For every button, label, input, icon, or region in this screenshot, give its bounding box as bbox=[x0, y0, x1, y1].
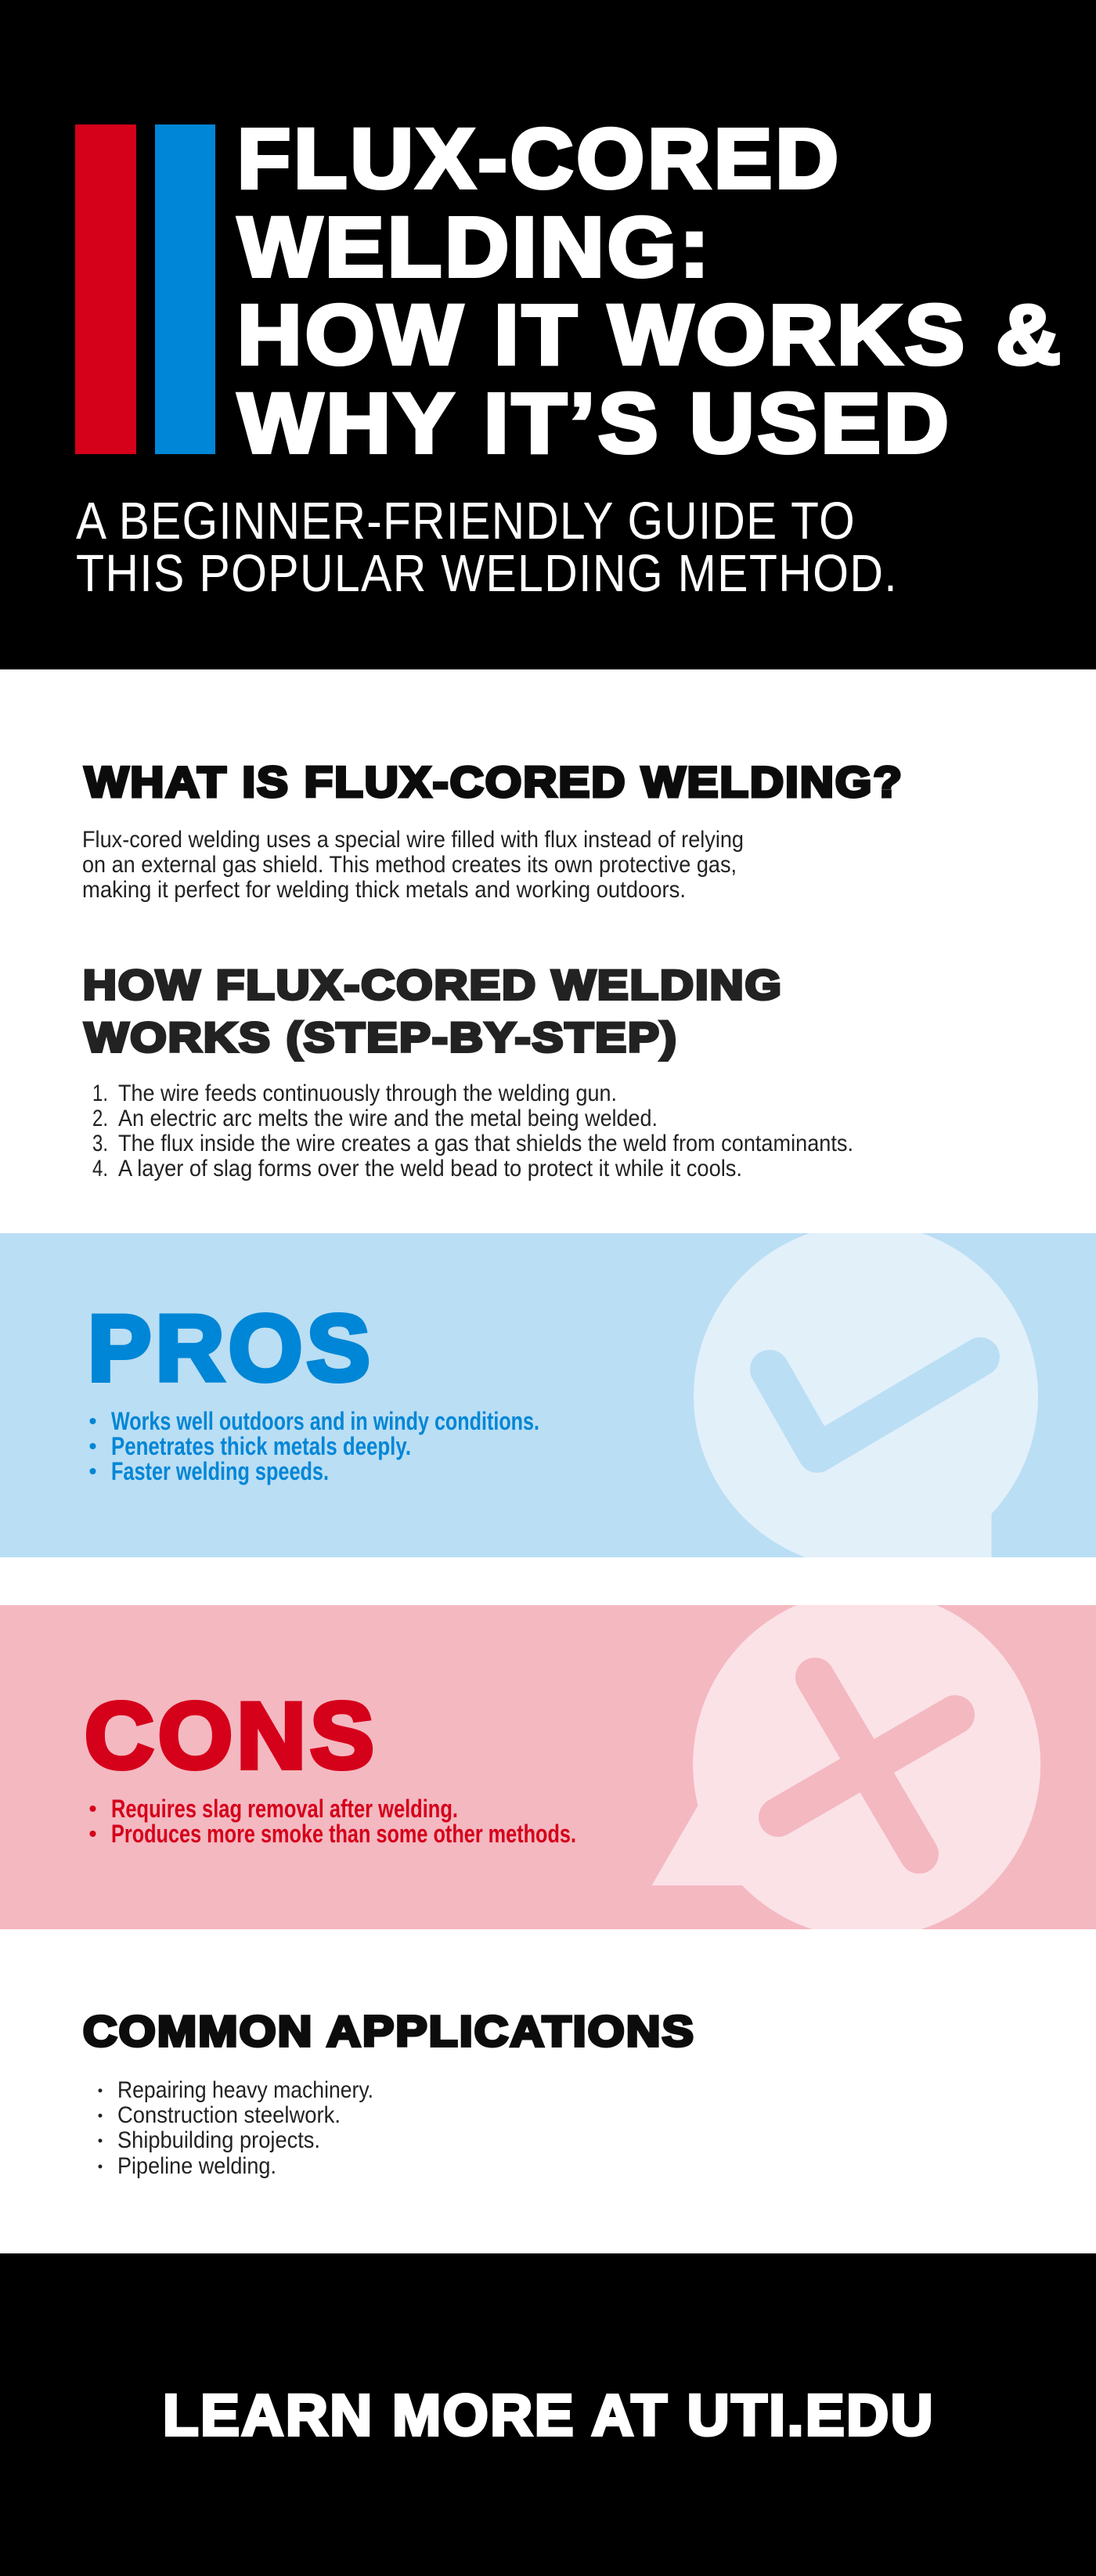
pros list: Faster welding speeds. bbox=[111, 1457, 329, 1485]
heading: how flux-cored welding works: WORKS (STEP-BY-STEP) bbox=[85, 1015, 678, 1061]
applications list: Pipeline welding. bbox=[117, 2153, 276, 2179]
numbered steps list bbox=[92, 1081, 853, 1182]
cons list: Requires slag removal after welding. bbox=[111, 1795, 458, 1823]
icon: red bar bbox=[75, 124, 136, 454]
numbered steps list: 2. bbox=[92, 1106, 108, 1131]
pros list bbox=[89, 1407, 539, 1485]
icon: check speech bubble bbox=[694, 1224, 1038, 1568]
cons list: Produces more smoke than some other methods. bbox=[111, 1820, 576, 1848]
icon: cross speech bubble bbox=[651, 1590, 1040, 1938]
title: HOW IT WORKS & bbox=[237, 287, 1064, 382]
applications list: Shipbuilding projects. bbox=[117, 2127, 320, 2153]
text block: definition: making it perfect for welding thick metals and working outdoors. bbox=[82, 877, 686, 903]
text block: definition bbox=[82, 827, 744, 903]
pros list: Works well outdoors and in windy conditions. bbox=[111, 1407, 539, 1435]
heading: pros: PROS bbox=[88, 1296, 374, 1401]
subtitle: THIS POPULAR WELDING METHOD. bbox=[76, 544, 898, 603]
numbered steps list: 1. bbox=[92, 1081, 108, 1106]
heading: how flux-cored welding works bbox=[83, 962, 783, 1061]
applications list bbox=[99, 2077, 373, 2179]
text block: definition: Flux-cored welding uses a special wire filled with flux instead of relying bbox=[82, 827, 744, 853]
heading: what is flux-cored welding: WHAT IS FLUX-CORED WELDING? bbox=[85, 758, 903, 806]
heading: how flux-cored welding works: HOW FLUX-CORED WELDING bbox=[83, 962, 783, 1008]
title: WHY IT’S USED bbox=[238, 376, 952, 470]
text block: definition: on an external gas shield. This method creates its own protective gas, bbox=[82, 852, 737, 878]
numbered steps list: The flux inside the wire creates a gas that shields the weld from contaminants. bbox=[118, 1131, 853, 1156]
icon: blue bar bbox=[155, 124, 215, 454]
heading: common applications: COMMON APPLICATIONS bbox=[83, 2007, 695, 2055]
numbered steps list: An electric arc melts the wire and the metal being welded. bbox=[118, 1106, 658, 1131]
applications list: Construction steelwork. bbox=[117, 2102, 341, 2128]
subtitle bbox=[76, 492, 898, 603]
panel: cons bbox=[0, 1590, 1096, 1938]
panel: pros bbox=[0, 1224, 1096, 1568]
numbered steps list: 3. bbox=[92, 1131, 108, 1156]
numbered steps list: A layer of slag forms over the weld bead to protect it while it cools. bbox=[118, 1156, 742, 1182]
numbered steps list: 4. bbox=[92, 1156, 108, 1182]
header panel bbox=[0, 0, 1096, 669]
title: WELDING: bbox=[238, 199, 712, 294]
title: FLUX-CORED bbox=[237, 111, 842, 205]
numbered steps list: The wire feeds continuously through the welding gun. bbox=[118, 1081, 617, 1106]
title bbox=[237, 111, 1064, 470]
heading: cons: CONS bbox=[85, 1683, 378, 1788]
footer panel bbox=[0, 2253, 1096, 2576]
subtitle: A BEGINNER-FRIENDLY GUIDE TO bbox=[76, 492, 856, 550]
call to action: LEARN MORE AT UTI.EDU bbox=[163, 2383, 935, 2448]
applications list: Repairing heavy machinery. bbox=[117, 2077, 373, 2103]
pros list: Penetrates thick metals deeply. bbox=[111, 1432, 411, 1460]
cons list bbox=[89, 1795, 576, 1848]
